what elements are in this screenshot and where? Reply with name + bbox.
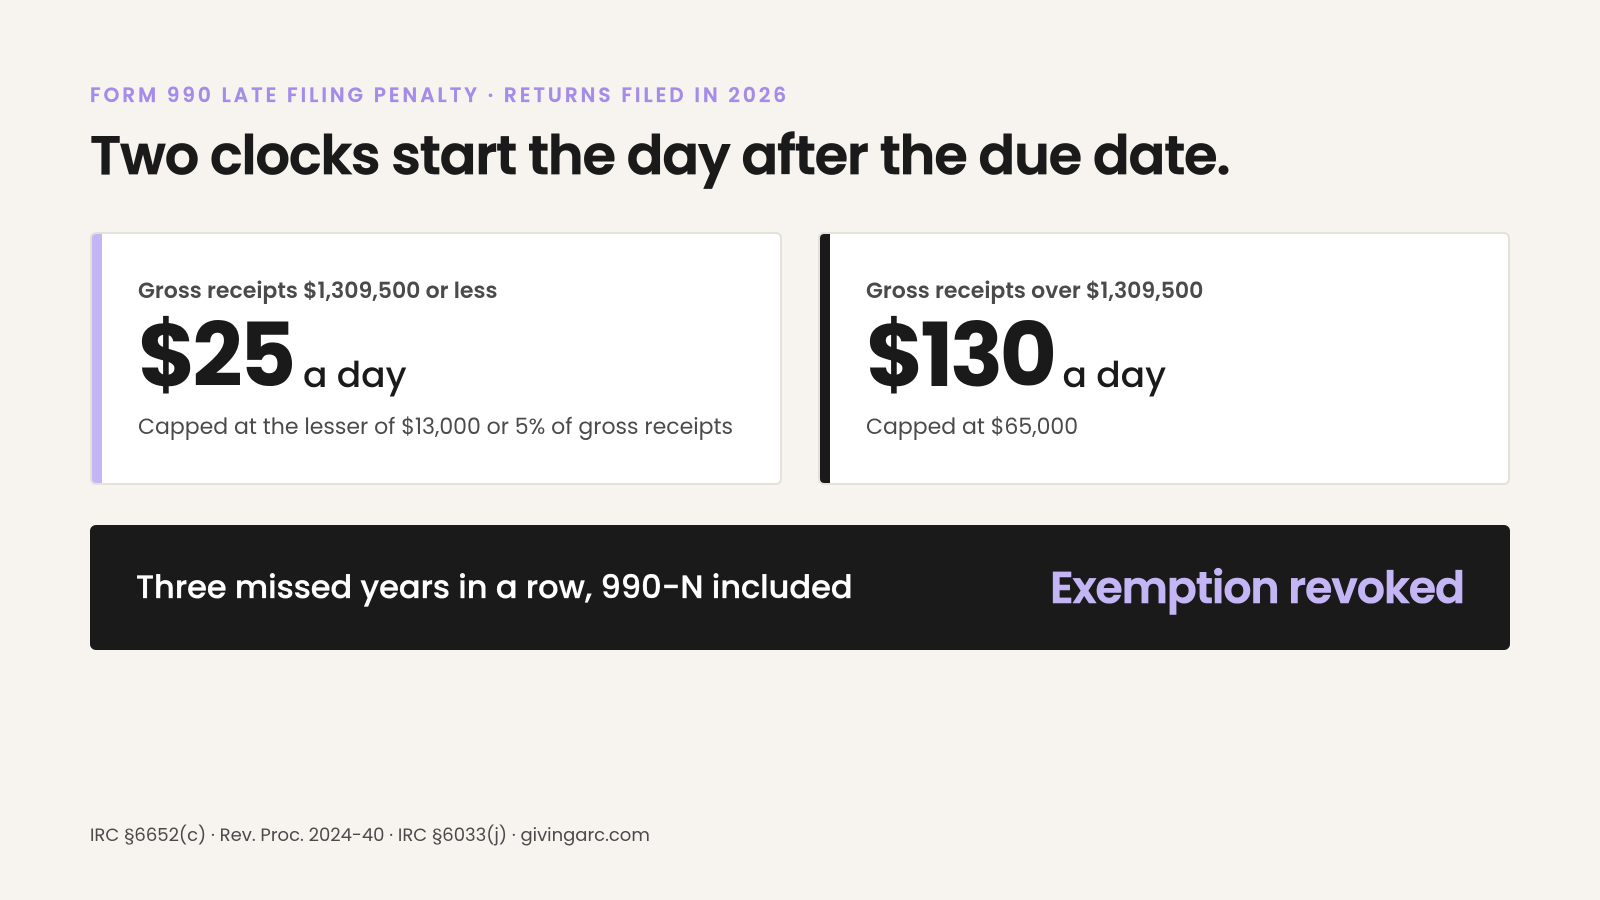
callout text: Three missed years in a row, 990-N included <box>136 565 853 610</box>
footer sources: IRC §6652(c) · Rev. Proc. 2024-40 · IRC §6033(j) · givingarc.com <box>90 823 650 848</box>
daily amount: $130 <box>866 294 1054 417</box>
cap note: Capped at $65,000 <box>866 411 1078 442</box>
cap note: Capped at the lesser of $13,000 or 5% of gross receipts <box>138 411 733 442</box>
panel: small organizations <box>90 232 782 485</box>
title: Two clocks start the day after the due date. <box>90 117 1230 193</box>
per day unit: a day <box>303 349 407 400</box>
accent stripe dark <box>820 234 830 483</box>
per day unit: a day <box>1062 349 1166 400</box>
callout result: Exemption revoked <box>1050 558 1464 619</box>
panel: large organizations <box>818 232 1510 485</box>
callout bar <box>90 525 1510 650</box>
receipts label: Gross receipts $1,309,500 or less <box>138 275 497 306</box>
eyebrow: FORM 990 LATE FILING PENALTY · RETURNS FILED IN 2026 <box>90 81 789 109</box>
receipts label: Gross receipts over $1,309,500 <box>866 275 1203 306</box>
accent stripe lavender <box>92 234 102 483</box>
daily amount: $25 <box>138 294 293 417</box>
